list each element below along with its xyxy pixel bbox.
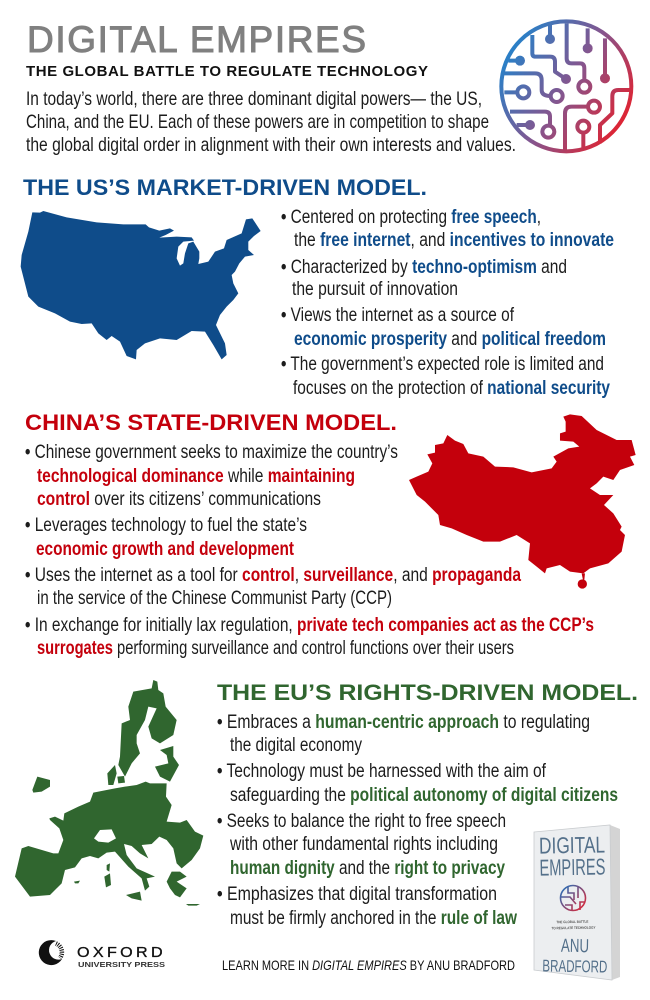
intro text: China, and the EU. Each of these powers are in competition to shape — [26, 112, 489, 133]
bullets: EU model: human dignity and the right to privacy — [230, 858, 505, 879]
bullets: EU model: the digital economy — [230, 735, 362, 756]
bullets: EU model — [217, 712, 618, 929]
book cover: DIGITAL — [539, 831, 605, 859]
section: EU model — [15, 680, 638, 929]
book cover: TO REGULATE TECHNOLOGY — [551, 926, 596, 930]
bullets: China model: technological dominance while maintaining — [37, 466, 355, 487]
bullets: US model — [281, 207, 614, 399]
section: US model — [21, 175, 614, 399]
bullets: China model: in the service of the Chinese Communist Party (CCP) — [37, 588, 392, 609]
bullets: US model: • Views the internet as a source of — [281, 305, 515, 326]
bullets: China model: • Uses the internet as a tool for control, surveillance, and propaganda — [25, 565, 521, 586]
logo: Oxford University Press: UNIVERSITY PRESS — [78, 962, 165, 969]
footer: learn more: LEARN MORE IN DIGITAL EMPIRES BY ANU BRADFORD — [222, 957, 515, 973]
logo: Oxford University Press: OXFORD — [77, 945, 166, 961]
bullets: China model: • Chinese government seeks to maximize the country’s — [25, 442, 398, 463]
map: United States — [21, 211, 261, 359]
book cover: BRADFORD — [542, 956, 608, 977]
intro text: In today’s world, there are three dominant digital powers— the US, — [26, 89, 482, 110]
heading: China model: CHINA’S STATE-DRIVEN MODEL. — [25, 410, 397, 435]
bullets: US model: • Characterized by techno-optimism and — [281, 257, 567, 278]
book cover: EMPIRES — [539, 853, 606, 881]
bullets: China model: control over its citizens’ communications — [37, 489, 321, 510]
bullets: EU model: • Embraces a human-centric approach to regulating — [217, 712, 590, 733]
map: European Union — [15, 680, 203, 906]
logo: Oxford University Press — [39, 940, 166, 969]
bullets: EU model: • Technology must be harnessed with the aim of — [217, 761, 547, 782]
title: DIGITAL EMPIRES — [27, 19, 366, 60]
bullets: EU model: with other fundamental rights including — [229, 834, 498, 855]
bullets: China model: • Leverages technology to fuel the state’s — [25, 515, 307, 536]
subtitle: THE GLOBAL BATTLE TO REGULATE TECHNOLOGY — [26, 63, 428, 80]
heading: EU model: THE EU’S RIGHTS-DRIVEN MODEL. — [217, 680, 638, 705]
book cover: ANU — [561, 936, 589, 957]
bullets: EU model: • Seeks to balance the right to free speech — [217, 811, 506, 832]
bullets: US model: economic prosperity and political freedom — [294, 329, 606, 350]
heading: US model: THE US’S MARKET-DRIVEN MODEL. — [23, 175, 427, 200]
map: China — [409, 414, 636, 589]
bullets: China model: economic growth and development — [36, 539, 295, 560]
bullets: EU model: • Emphasizes that digital transformation — [217, 884, 497, 905]
intro text — [26, 89, 516, 156]
bullets: China model — [25, 442, 594, 659]
section: China model — [25, 410, 636, 659]
bullets: EU model: must be firmly anchored in the rule of law — [230, 908, 517, 929]
bullets: China model: • In exchange for initially lax regulation, private tech companies act as the CCP’s — [25, 615, 594, 636]
bullets: US model: • Centered on protecting free speech, — [281, 207, 541, 228]
intro text: the global digital order in alignment with their own interests and values. — [26, 135, 516, 156]
bullets: US model: focuses on the protection of national security — [293, 378, 610, 399]
bullets: US model: the pursuit of innovation — [292, 279, 458, 300]
bullets: China model: surrogates performing surveillance and control functions over their users — [37, 638, 514, 659]
book cover — [534, 825, 620, 980]
bullets: US model: the free internet, and incentives to innovate — [294, 230, 614, 251]
book cover: THE GLOBAL BATTLE — [556, 920, 589, 924]
icon: circuit globe — [501, 21, 631, 151]
